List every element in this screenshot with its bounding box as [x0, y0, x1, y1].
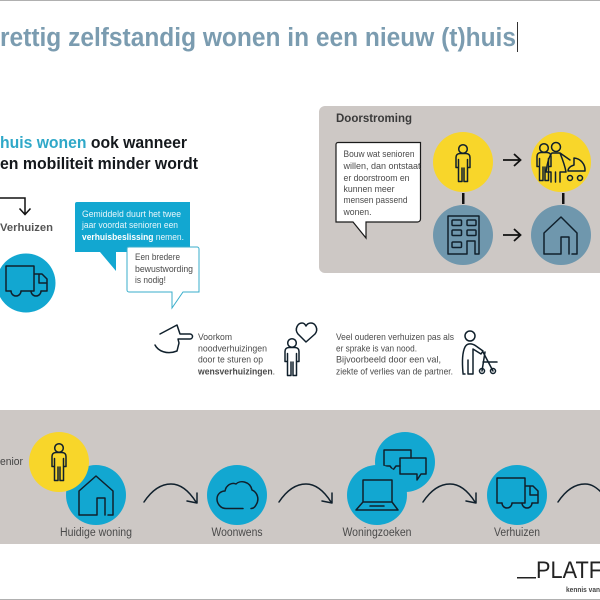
icon: senior with walker — [462, 331, 497, 374]
icon: senior on yellow — [433, 132, 493, 192]
text: voorkom noodverhuizingen: wensverhuizingen. — [197, 366, 275, 378]
label: Verhuizen: Verhuizen — [0, 222, 53, 234]
text: veel ouderen: ziekte of verlies van de partner. — [336, 366, 453, 378]
callout: Doorstroming text: er doorstroom en — [344, 173, 410, 184]
label: Huidige woning: Huidige woning — [60, 527, 132, 539]
callout: white speech bubble: is nodig! — [135, 275, 166, 286]
icon: truck circle — [0, 254, 56, 312]
title: rettig zelfstandig wonen in een nieuw (t)huis — [0, 24, 516, 52]
label: Verhuizen: Verhuizen — [494, 527, 540, 539]
callout: white speech bubble: bewustwording — [135, 264, 193, 275]
callout: Doorstroming text: Bouw wat senioren — [344, 149, 414, 160]
text: veel ouderen: Bijvoorbeeld door een val, — [336, 354, 441, 366]
icon: family on yellow — [531, 132, 591, 192]
callout: Doorstroming text: kunnen meer — [344, 184, 394, 195]
arrow to Verhuizen — [0, 198, 30, 214]
icon: truck circle — [487, 465, 547, 525]
icon: senior on yellow — [29, 432, 89, 492]
text: veel ouderen: er sprake is van nood. — [336, 344, 417, 354]
panel: customer journey band — [0, 410, 600, 544]
label: senior: enior — [0, 456, 23, 468]
logo: Platform — [517, 557, 600, 594]
callout: blue speech bubble: Gemiddeld duurt het twee — [82, 209, 181, 219]
text: voorkom noodverhuizingen: door te sturen op — [198, 354, 263, 366]
text: voorkom noodverhuizingen: noodverhuizingen — [198, 344, 267, 354]
callout: blue speech bubble: verhuisbeslissing nemen. — [82, 232, 184, 242]
text: veel ouderen — [336, 332, 454, 378]
icon: laptop circle — [347, 465, 407, 525]
label: Woonwens: Woonwens — [212, 527, 263, 539]
callout: white speech bubble — [127, 247, 199, 308]
connector — [562, 193, 564, 204]
icon: pointing hand — [155, 325, 192, 353]
arrow: person to family — [503, 154, 520, 166]
heading: en mobiliteit minder wordt — [0, 154, 198, 173]
arrow: apartment to house — [503, 229, 520, 241]
icon: house on blue — [531, 205, 591, 265]
callout: Doorstroming text: willen, dan ontstaat — [343, 161, 421, 172]
callout: Doorstroming text — [336, 142, 421, 238]
icon: person with heart — [285, 323, 317, 376]
text: voorkom noodverhuizingen — [197, 332, 275, 378]
callout: blue speech bubble: jaar voordat senioren een — [81, 220, 178, 230]
icon: house circle — [66, 465, 126, 525]
icon: chat circle — [375, 432, 435, 492]
icon: apartment on blue — [433, 205, 493, 265]
arrow — [279, 484, 332, 503]
text: veel ouderen: Veel ouderen verhuizen pas als — [336, 332, 454, 343]
connector — [462, 193, 464, 204]
heading: Doorstroming: Doorstroming — [336, 113, 412, 125]
arrow — [423, 484, 476, 503]
arrow — [558, 484, 600, 502]
arrow — [144, 484, 197, 503]
callout: Doorstroming text: wonen. — [343, 207, 372, 218]
panel: Doorstroming — [319, 106, 600, 273]
label: Woningzoeken: Woningzoeken — [342, 527, 412, 539]
heading — [0, 133, 198, 173]
heading: huis wonen ook wanneer — [0, 133, 187, 152]
callout: blue speech bubble — [75, 202, 190, 271]
icon: cloud circle — [207, 465, 267, 525]
text: voorkom noodverhuizingen: Voorkom — [198, 332, 232, 343]
callout: Doorstroming text: mensen passend — [344, 195, 408, 206]
callout: white speech bubble: Een bredere — [135, 252, 180, 263]
